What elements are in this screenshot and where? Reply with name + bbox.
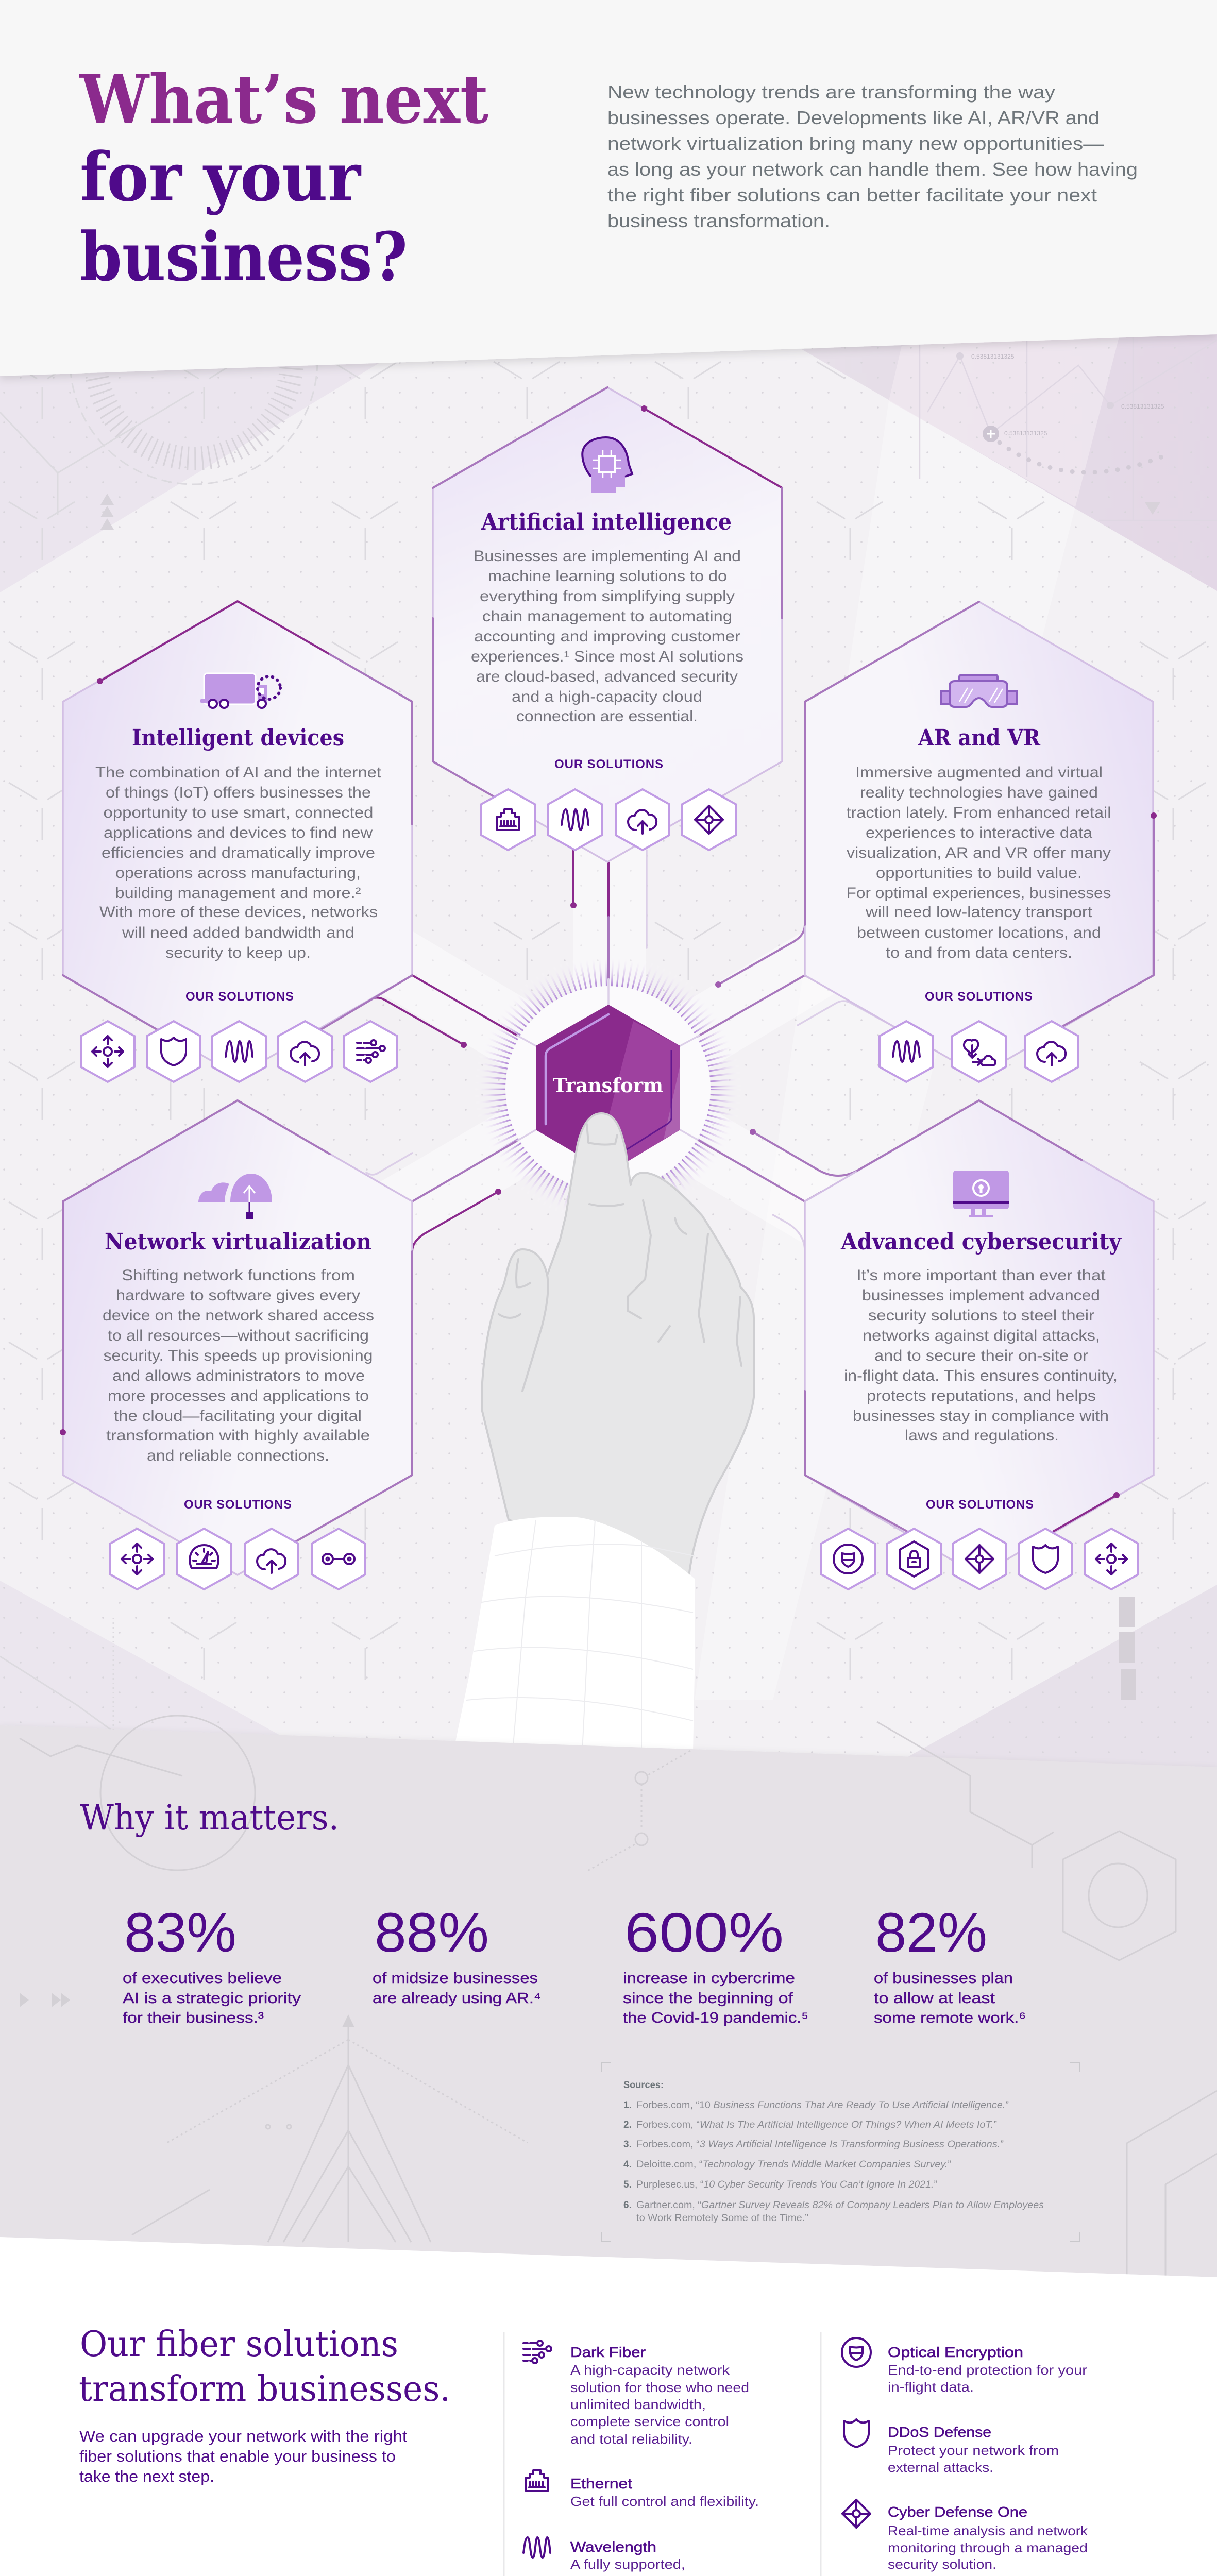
intro text: We can upgrade your network with the right bbox=[79, 2427, 407, 2445]
stat: 82% bbox=[874, 1901, 1026, 2026]
solution icons bbox=[110, 1529, 365, 1589]
solution icons bbox=[81, 1021, 397, 1082]
item: Dark Fiber: solution for those who need bbox=[570, 2380, 749, 2395]
intro text: businesses operate. Developments like AI, AR/VR and bbox=[607, 107, 1100, 128]
body text: security. This speeds up provisioning bbox=[103, 1347, 373, 1364]
heading: Our fiber solutions bbox=[80, 2324, 398, 2365]
white spokes around the centre bbox=[356, 835, 860, 1236]
accent line bbox=[63, 1100, 412, 1541]
accent line bbox=[805, 602, 1154, 1026]
heading: AR and VR bbox=[918, 725, 1040, 751]
body text: reality technologies have gained bbox=[860, 784, 1098, 801]
background: hexagon field: 0.53813131325 bbox=[1121, 403, 1164, 410]
body text: and reliable connections. bbox=[147, 1447, 329, 1464]
item: Wavelength: A fully supported, bbox=[570, 2556, 685, 2572]
item: Dark Fiber: A high-capacity network bbox=[570, 2362, 730, 2378]
body text: more processes and applications to bbox=[108, 1387, 369, 1404]
body text: networks against digital attacks, bbox=[863, 1327, 1100, 1344]
body text: between customer locations, and bbox=[857, 924, 1101, 941]
body text: businesses stay in compliance with bbox=[853, 1408, 1109, 1425]
panel: network virtualization bbox=[60, 1100, 412, 1589]
body text: opportunity to use smart, connected bbox=[103, 804, 373, 821]
stat: 88%: 88% bbox=[375, 1901, 489, 1963]
solution icons bbox=[821, 1529, 1138, 1589]
body text: transformation with highly available bbox=[106, 1427, 370, 1444]
stat: 600%: the Covid-19 pandemic.⁵ bbox=[623, 2010, 808, 2026]
body text: in-flight data. This ensures continuity, bbox=[844, 1367, 1118, 1384]
heading bbox=[79, 2324, 450, 2410]
item: Cyber Defense One: monitoring through a managed bbox=[888, 2540, 1088, 2555]
background: hexagon field bbox=[0, 237, 1217, 1803]
decorative circuit lines bbox=[20, 1716, 1217, 2277]
intro text: New technology trends are transforming the way bbox=[607, 81, 1055, 103]
stat: 600% bbox=[623, 1901, 808, 2026]
stat: 82%: 82% bbox=[875, 1901, 987, 1963]
heading: transform businesses. bbox=[79, 2369, 450, 2410]
icon: truck bbox=[200, 673, 280, 708]
sources: Forbes.com, “10 Business Functions That Are Ready To Use Artificial Intelligence. ” bbox=[636, 2100, 1009, 2111]
item: Wavelength: Wavelength bbox=[570, 2539, 656, 2555]
body text: operations across manufacturing, bbox=[115, 865, 361, 882]
body text: and to secure their on-site or bbox=[874, 1347, 1088, 1364]
stat: 88% bbox=[373, 1901, 541, 2007]
item: Cyber Defense One: security solution. bbox=[888, 2556, 996, 2572]
body text: security solutions to steel their bbox=[868, 1307, 1094, 1324]
body text bbox=[95, 764, 382, 961]
body text: opportunities to build value. bbox=[876, 865, 1082, 882]
body text: building management and more.² bbox=[115, 885, 361, 902]
body text: experiences to interactive data bbox=[866, 824, 1092, 841]
body text: visualization, AR and VR offer many bbox=[847, 844, 1111, 861]
sources: 4. bbox=[623, 2159, 632, 2170]
intro text: the right fiber solutions can better facilitate your next bbox=[607, 184, 1097, 206]
body text: device on the network shared access bbox=[103, 1307, 374, 1324]
item: Optical Encryption: Optical Encryption bbox=[888, 2344, 1023, 2360]
heading: Advanced cybersecurity bbox=[840, 1229, 1122, 1255]
body text: experiences.¹ Since most AI solutions bbox=[471, 648, 743, 665]
body text: The combination of AI and the internet bbox=[95, 764, 382, 781]
item: DDoS Defense bbox=[844, 2419, 1059, 2475]
icon: cloud upload bbox=[198, 1174, 272, 1219]
stat: 600%: since the beginning of bbox=[623, 1990, 793, 2007]
sources: Forbes.com, “ 3 Ways Artificial Intelligence Is Transforming Business Operations. ” bbox=[636, 2139, 1004, 2150]
accent line bbox=[805, 1100, 1082, 1531]
body text: businesses implement advanced bbox=[862, 1287, 1100, 1304]
body text: to and from data centers. bbox=[886, 944, 1072, 961]
item: DDoS Defense: Protect your network from bbox=[888, 2443, 1059, 2458]
item: Dark Fiber: unlimited bandwidth, bbox=[570, 2397, 706, 2412]
solutions label: OUR SOLUTIONS bbox=[926, 1498, 1034, 1512]
body text: With more of these devices, networks bbox=[99, 904, 378, 921]
body text bbox=[103, 1267, 374, 1464]
intro text bbox=[79, 2427, 407, 2485]
body text: chain management to automating bbox=[482, 608, 732, 625]
stat: 82%: of businesses plan bbox=[874, 1970, 1013, 1987]
item: Cyber Defense One: Cyber Defense One bbox=[888, 2504, 1027, 2520]
solutions label: OUR SOLUTIONS bbox=[925, 990, 1033, 1004]
item: DDoS Defense: external attacks. bbox=[888, 2460, 993, 2475]
item: DDoS Defense: DDoS Defense bbox=[888, 2424, 991, 2440]
body text: everything from simplifying supply bbox=[480, 588, 735, 605]
item: Ethernet bbox=[526, 2470, 759, 2509]
stat: 83%: of executives believe bbox=[123, 1970, 282, 1987]
intro text: fiber solutions that enable your business to bbox=[79, 2447, 396, 2465]
icon: VR goggles bbox=[941, 675, 1017, 707]
stat: 600%: 600% bbox=[624, 1901, 784, 1963]
panel: artificial intelligence bbox=[433, 387, 782, 862]
body text: will need low-latency transport bbox=[865, 904, 1093, 921]
solution icons bbox=[481, 789, 736, 850]
item: Optical Encryption: in-flight data. bbox=[888, 2379, 974, 2395]
body text: hardware to software gives every bbox=[116, 1287, 360, 1304]
sources: Gartner.com, “Gartner Survey Reveals 82% of Company Leaders Plan to Allow Employees bbox=[636, 2200, 1044, 2211]
body text: machine learning solutions to do bbox=[488, 568, 727, 585]
item: Cyber Defense One: Real-time analysis and network bbox=[888, 2523, 1088, 2538]
sources: Forbes.com, “ What Is The Artificial Intelligence Of Things? When AI Meets IoT. ” bbox=[636, 2120, 997, 2130]
body text bbox=[471, 548, 743, 725]
connector lines bbox=[318, 850, 895, 1251]
body text: Shifting network functions from bbox=[122, 1267, 355, 1284]
body text: laws and regulations. bbox=[905, 1427, 1059, 1444]
item: Cyber Defense One bbox=[842, 2500, 1088, 2572]
panel: advanced cybersecurity bbox=[805, 1100, 1154, 1589]
header bbox=[0, 0, 1217, 376]
intro text: take the next step. bbox=[79, 2467, 214, 2485]
intro text: business transformation. bbox=[607, 210, 830, 231]
accent line bbox=[644, 409, 782, 488]
stat: 83%: AI is a strategic priority bbox=[123, 1990, 301, 2007]
solutions label: OUR SOLUTIONS bbox=[184, 1498, 292, 1512]
heading: Artificial intelligence bbox=[481, 509, 732, 535]
heading: Why it matters. bbox=[80, 1798, 339, 1838]
body text: traction lately. From enhanced retail bbox=[846, 804, 1111, 821]
transform button bbox=[536, 1005, 680, 1173]
stat: 600%: increase in cybercrime bbox=[623, 1970, 795, 1987]
body text: and allows administrators to move bbox=[112, 1367, 365, 1384]
item: Ethernet: Get full control and flexibility. bbox=[570, 2494, 759, 2509]
body text: security to keep up. bbox=[165, 944, 311, 961]
stat: 82%: some remote work.⁶ bbox=[874, 2010, 1026, 2026]
intro text bbox=[607, 81, 1138, 231]
intro text: network virtualization bring many new opportunities— bbox=[607, 133, 1104, 154]
icon: secure monitor bbox=[953, 1171, 1009, 1217]
body text: efficiencies and dramatically improve bbox=[102, 844, 375, 861]
accent line bbox=[100, 601, 330, 681]
intro text: as long as your network can handle them. See how having bbox=[607, 159, 1138, 180]
solutions label: OUR SOLUTIONS bbox=[554, 757, 663, 771]
body text bbox=[846, 764, 1111, 961]
item: Ethernet: Ethernet bbox=[570, 2476, 632, 2492]
body text: For optimal experiences, businesses bbox=[846, 885, 1111, 902]
sources: 6. bbox=[623, 2200, 632, 2211]
sources: 2. bbox=[623, 2120, 632, 2130]
item: Optical Encryption bbox=[842, 2338, 1087, 2395]
body text: will need added bandwidth and bbox=[122, 924, 354, 941]
shirt cuff bbox=[453, 1517, 695, 1752]
body text: the cloud—facilitating your digital bbox=[114, 1408, 362, 1425]
icon: AI head bbox=[582, 437, 632, 493]
title bbox=[79, 60, 488, 296]
sources: Sources: bbox=[623, 2080, 664, 2091]
sources: Purplesec.us, “10 Cyber Security Trends You Can’t Ignore In 2021. ” bbox=[636, 2179, 937, 2190]
sources: to Work Remotely Some of the Time.” bbox=[636, 2213, 808, 2224]
item: Dark Fiber bbox=[523, 2341, 749, 2447]
title: business? bbox=[80, 217, 408, 296]
stat: 83%: 83% bbox=[124, 1901, 236, 1963]
solutions label: OUR SOLUTIONS bbox=[185, 990, 294, 1004]
button label: Transform bbox=[553, 1074, 663, 1097]
stat: 88%: of midsize businesses bbox=[373, 1970, 538, 1987]
sources: Deloitte.com, “ Technology Trends Middle Market Companies Survey. ” bbox=[636, 2159, 951, 2170]
body text: accounting and improving customer bbox=[474, 628, 740, 645]
background: hexagon field: 0.53813131325 bbox=[971, 353, 1015, 360]
hand illustration bbox=[482, 1113, 754, 1577]
item: Wavelength bbox=[523, 2537, 695, 2576]
title: for your bbox=[80, 138, 361, 216]
heading: Network virtualization bbox=[105, 1229, 371, 1255]
body text: and a high-capacity cloud bbox=[512, 688, 702, 705]
sources bbox=[602, 2062, 1079, 2242]
body text: are cloud-based, advanced security bbox=[476, 668, 738, 685]
sources: 5. bbox=[623, 2179, 632, 2190]
heading: Intelligent devices bbox=[132, 725, 344, 751]
body text: Immersive augmented and virtual bbox=[855, 764, 1103, 781]
body text: It’s more important than ever that bbox=[856, 1267, 1106, 1284]
title: What’s next bbox=[79, 60, 488, 139]
item: Optical Encryption: End-to-end protection for your bbox=[888, 2362, 1087, 2378]
section: why it matters bbox=[0, 1716, 1217, 2277]
body text: to all resources—without sacrificing bbox=[108, 1327, 369, 1344]
radial burst around the button bbox=[491, 971, 725, 1206]
panel: intelligent devices bbox=[63, 601, 412, 1082]
sources: 1. bbox=[623, 2100, 632, 2111]
item: Dark Fiber: complete service control bbox=[570, 2414, 729, 2429]
body text bbox=[844, 1267, 1118, 1444]
body text: applications and devices to find new bbox=[104, 824, 373, 841]
solution icons bbox=[880, 1021, 1078, 1082]
item: Dark Fiber: Dark Fiber bbox=[570, 2344, 646, 2360]
body text: connection are essential. bbox=[516, 708, 698, 725]
sources: 3. bbox=[623, 2139, 632, 2150]
body text: of things (IoT) offers businesses the bbox=[106, 784, 371, 801]
section: our fiber solutions bbox=[0, 2237, 1217, 2576]
background: hexagon field: 0.53813131325 bbox=[1004, 430, 1047, 437]
item: Dark Fiber: and total reliability. bbox=[570, 2431, 692, 2447]
panel: AR and VR bbox=[805, 602, 1157, 1082]
stat: 83%: for their business.³ bbox=[123, 2010, 264, 2026]
stat: 83% bbox=[123, 1901, 301, 2026]
body text: Businesses are implementing AI and bbox=[474, 548, 741, 565]
stat: 88%: are already using AR.⁴ bbox=[373, 1990, 541, 2007]
body text: protects reputations, and helps bbox=[867, 1387, 1096, 1404]
stat: 82%: to allow at least bbox=[874, 1990, 995, 2007]
